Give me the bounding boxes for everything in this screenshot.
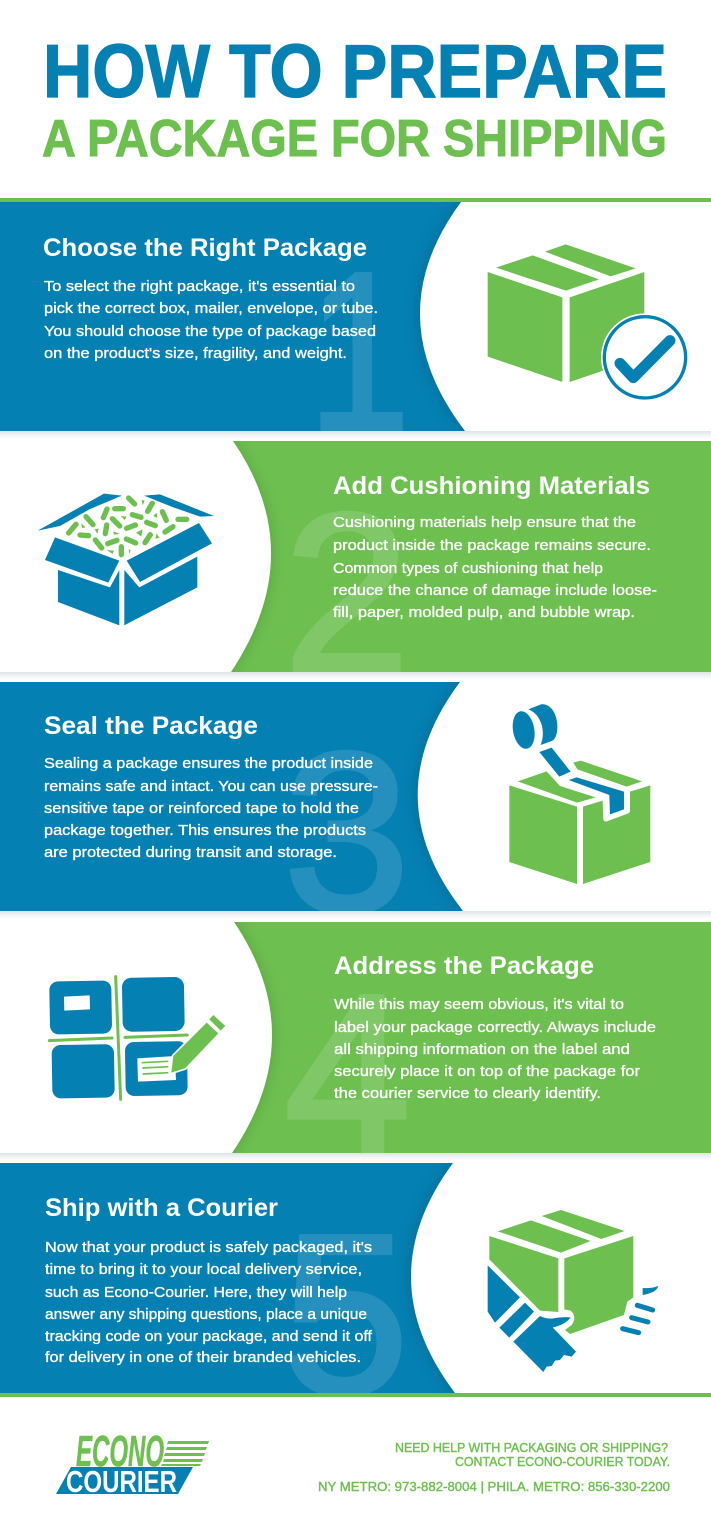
contact text: NY METRO: 973-882-8004 | PHILA. METRO: 856-330-2200 <box>318 1479 670 1494</box>
body text: step 4: securely place it on top of the package for <box>334 1063 640 1080</box>
body text: step 2: product inside the package remains secure. <box>333 537 651 554</box>
title: HOW TO PREPARE <box>43 29 667 113</box>
body text: step 2 <box>333 514 657 621</box>
heading: ship with a courier: Ship with a Courier <box>45 1194 278 1222</box>
big number 4: 4 <box>284 948 411 1202</box>
logo: Econo Courier: ECONO <box>76 1427 164 1476</box>
body text: step 5 <box>45 1239 373 1366</box>
heading: seal the package: Seal the Package <box>44 712 258 740</box>
big number 3: 3 <box>283 706 410 960</box>
body text: step 3: package together. This ensures the products <box>44 822 366 839</box>
body text: step 2: reduce the chance of damage include loose- <box>333 582 657 599</box>
contact text: NEED HELP WITH PACKAGING OR SHIPPING? <box>395 1440 668 1455</box>
title <box>42 29 667 168</box>
body text: step 3: sensitive tape or reinforced tape to hold the <box>44 800 359 817</box>
panel: step 4 address the package <box>48 922 711 1153</box>
contact text: CONTACT ECONO-COURIER TODAY. <box>455 1454 670 1469</box>
body text: step 5: such as Econo-Courier. Here, they will help <box>45 1284 347 1301</box>
heading: choose the right package: Choose the Right Package <box>43 234 367 262</box>
body text: step 4: label your package correctly. Always include <box>334 1019 656 1036</box>
body text: step 3: Sealing a package ensures the product inside <box>44 755 373 772</box>
body text: step 3: remains safe and intact. You can use pressure- <box>44 778 378 795</box>
big number 1: 1 <box>308 226 410 480</box>
body text: step 5: time to bring it to your local delivery service, <box>45 1261 362 1278</box>
body text: step 2: fill, paper, molded pulp, and bubble wrap. <box>333 604 635 621</box>
body text: step 1: on the product's size, fragility, and weight. <box>44 345 347 362</box>
icon: package top with label and pencil <box>49 977 225 1099</box>
big number 2: 2 <box>283 467 410 721</box>
contact text <box>318 1440 670 1494</box>
body text: step 2: Cushioning materials help ensure that the <box>333 514 636 531</box>
body text: step 2: Common types of cushioning that help <box>333 560 603 577</box>
icon: box with tape roll <box>509 704 650 884</box>
body text: step 5: Now that your product is safely packaged, it's <box>45 1239 372 1256</box>
icon: open box with loose fill <box>38 494 214 625</box>
body text: step 1 <box>44 278 378 362</box>
body text: step 5: answer any shipping questions, place a unique <box>45 1306 367 1323</box>
body text: step 4: all shipping information on the label and <box>334 1041 630 1058</box>
logo: Econo Courier: COURIER <box>66 1464 177 1499</box>
body text: step 4: the courier service to clearly identify. <box>334 1085 601 1102</box>
heading: address the package: Address the Package <box>334 952 594 980</box>
body text: step 1: pick the correct box, mailer, envelope, or tube. <box>44 300 378 317</box>
logo: Econo Courier <box>56 1427 209 1499</box>
panel: step 5 ship with a courier <box>0 1163 658 1393</box>
panel: step 1 choose the right package <box>0 202 688 431</box>
body text: step 3: are protected during transit and storage. <box>44 844 337 861</box>
icon: hand holding package <box>488 1210 658 1372</box>
icon: box with check mark <box>488 244 689 401</box>
panel: step 3 seal the package <box>0 682 650 911</box>
body text: step 1: You should choose the type of package based <box>44 323 376 340</box>
body text: step 4 <box>334 996 656 1102</box>
big number 5: 5 <box>282 1188 409 1442</box>
heading: add cushioning materials: Add Cushioning Materials <box>333 472 650 500</box>
body text: step 1: To select the right package, it's essential to <box>44 278 355 295</box>
body text: step 5: for delivery in one of their branded vehicles. <box>45 1349 361 1366</box>
body text: step 4: While this may seem obvious, it's vital to <box>334 996 624 1013</box>
body text: step 5: tracking code on your package, and send it off <box>45 1328 373 1345</box>
panel: step 2 add cushioning materials <box>38 441 711 672</box>
body text: step 3 <box>44 755 378 861</box>
